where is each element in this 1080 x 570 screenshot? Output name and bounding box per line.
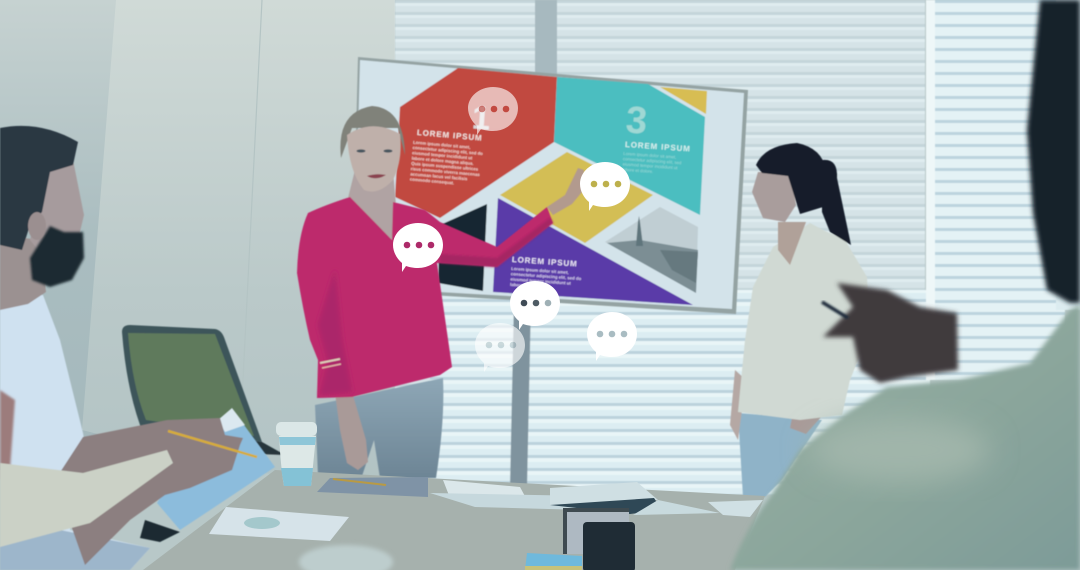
hair bbox=[340, 106, 405, 158]
right hand on screen bbox=[547, 168, 584, 215]
screen label: red panel: labore et dolore magna aliqua. bbox=[411, 156, 474, 166]
screen label: purple panel: consectetur adipiscing elit, sed do bbox=[511, 271, 582, 281]
screen label: teal panel: Lorem ipsum dolor sit amet, bbox=[623, 151, 676, 160]
printed chart sheet bbox=[209, 507, 349, 541]
blue clipboard bbox=[157, 410, 275, 530]
chat bubble: on pink blouse bbox=[393, 223, 443, 272]
cuff shading bbox=[318, 270, 352, 395]
screen label: teal panel bbox=[622, 140, 691, 177]
screen label: red panel bbox=[410, 128, 485, 188]
red hexagon panel bbox=[395, 68, 557, 218]
white paper corner on clipboard bbox=[218, 408, 245, 432]
pen in hand bbox=[822, 302, 848, 318]
window blinds bbox=[395, 0, 1080, 495]
dark photo panel bbox=[438, 204, 487, 291]
screen label: red panel: Lorem ipsum dolor sit amet, bbox=[413, 140, 471, 150]
face bbox=[30, 155, 84, 265]
chat bubble: below the screen bbox=[510, 281, 560, 330]
beard bbox=[30, 226, 84, 287]
screen label: purple panel: LOREM IPSUM bbox=[512, 255, 578, 269]
seated man on the left bbox=[0, 126, 275, 570]
foreground person bbox=[730, 0, 1080, 570]
green shirt bbox=[730, 305, 1080, 570]
face bbox=[347, 126, 401, 192]
shirt bbox=[0, 295, 150, 570]
screen label: purple panel bbox=[510, 255, 583, 292]
dark binder edge bbox=[550, 498, 662, 514]
pink blouse bbox=[297, 197, 553, 398]
chat bubble: top faded on red panel bbox=[468, 87, 518, 135]
screen label: teal panel: eiusmod tempor incididunt ut bbox=[622, 161, 678, 170]
pencil on folder bbox=[333, 479, 386, 485]
teal panel bbox=[554, 77, 705, 215]
screen label: teal panel: labore et dolore. bbox=[622, 167, 653, 174]
arm bbox=[55, 418, 243, 565]
screen label: red panel: risus commodo viverra maecenas bbox=[411, 166, 481, 177]
open notebook bbox=[0, 450, 173, 547]
chat bubble: faded on blinds bbox=[475, 323, 525, 372]
chat bubble: right on blinds bbox=[587, 312, 637, 361]
arm along the side bbox=[730, 370, 746, 440]
sheet on the right bbox=[633, 500, 720, 515]
arm shading bbox=[440, 218, 553, 267]
screen label: teal panel: consectetur adipiscing elit, sed bbox=[623, 156, 682, 165]
pen holder bbox=[583, 522, 635, 570]
yellow panel bbox=[500, 152, 653, 243]
yellow pencil bbox=[168, 431, 257, 457]
sticky notes bbox=[525, 553, 582, 570]
screen label: teal panel: LOREM IPSUM bbox=[625, 140, 691, 154]
face bbox=[752, 172, 796, 222]
screen label: purple panel: Lorem ipsum dolor sit amet, bbox=[511, 266, 569, 275]
screen label: red panel: eiusmod tempor incididunt ut bbox=[412, 150, 473, 161]
dark head bbox=[1027, 0, 1080, 303]
screen number 1: 1 bbox=[471, 98, 492, 137]
trousers bbox=[315, 378, 443, 478]
neck bbox=[0, 235, 46, 310]
jeans bbox=[738, 413, 822, 497]
screen label: red panel: commodo consequat. bbox=[410, 177, 454, 185]
hair bbox=[0, 126, 78, 250]
conference table bbox=[143, 422, 765, 570]
shirt lower shadow bbox=[0, 530, 150, 570]
screen label: red panel: consectetur adipiscing elit, sed do bbox=[412, 145, 483, 156]
screen frame bbox=[352, 57, 748, 314]
ear bbox=[28, 212, 46, 240]
hair bbox=[756, 143, 826, 214]
small yellow corner bbox=[660, 87, 707, 114]
wall-mounted display bbox=[352, 57, 748, 314]
white blouse bbox=[738, 223, 870, 420]
screen label: purple panel: eiusmod tempor incididunt ut bbox=[510, 277, 572, 286]
neck and chest bbox=[348, 170, 396, 240]
foreground cup lid bbox=[299, 545, 393, 570]
far right sheet bbox=[708, 500, 763, 517]
lighter shirt highlight bbox=[810, 418, 990, 482]
chat bubble: on yellow panel bbox=[580, 162, 630, 211]
woman on the right bbox=[730, 143, 870, 497]
blurred hand at edge bbox=[0, 390, 15, 480]
purple panel bbox=[493, 198, 693, 305]
screen label: red panel: Quis ipsum suspendisse ultrices bbox=[411, 161, 479, 172]
presenter: woman in pink bbox=[297, 106, 584, 478]
folder on table bbox=[317, 477, 428, 497]
ponytail bbox=[822, 160, 851, 245]
paper pile bbox=[443, 480, 527, 500]
screen label: purple panel: labore et dolore. bbox=[510, 282, 544, 289]
dark area under clipboard bbox=[140, 520, 180, 542]
screen surface bbox=[354, 60, 744, 309]
raised hand bbox=[823, 283, 958, 383]
glass stand bbox=[563, 508, 629, 554]
city photo panel bbox=[605, 207, 698, 293]
binder bbox=[550, 482, 658, 505]
bracelet stripes bbox=[320, 359, 341, 368]
neck and chest bbox=[778, 222, 806, 265]
screen number 3: 3 bbox=[624, 99, 649, 143]
screen label: red panel: LOREM IPSUM bbox=[417, 128, 483, 143]
coffee cup bbox=[276, 422, 317, 486]
screen label: red panel: accumsan lacus vel facilisis bbox=[410, 171, 468, 181]
chair bbox=[122, 325, 285, 455]
eyes and mouth bbox=[356, 149, 392, 178]
left forearm and hand bbox=[335, 392, 368, 470]
hand on hip bbox=[790, 416, 822, 434]
thin sheets under papers bbox=[430, 493, 660, 512]
